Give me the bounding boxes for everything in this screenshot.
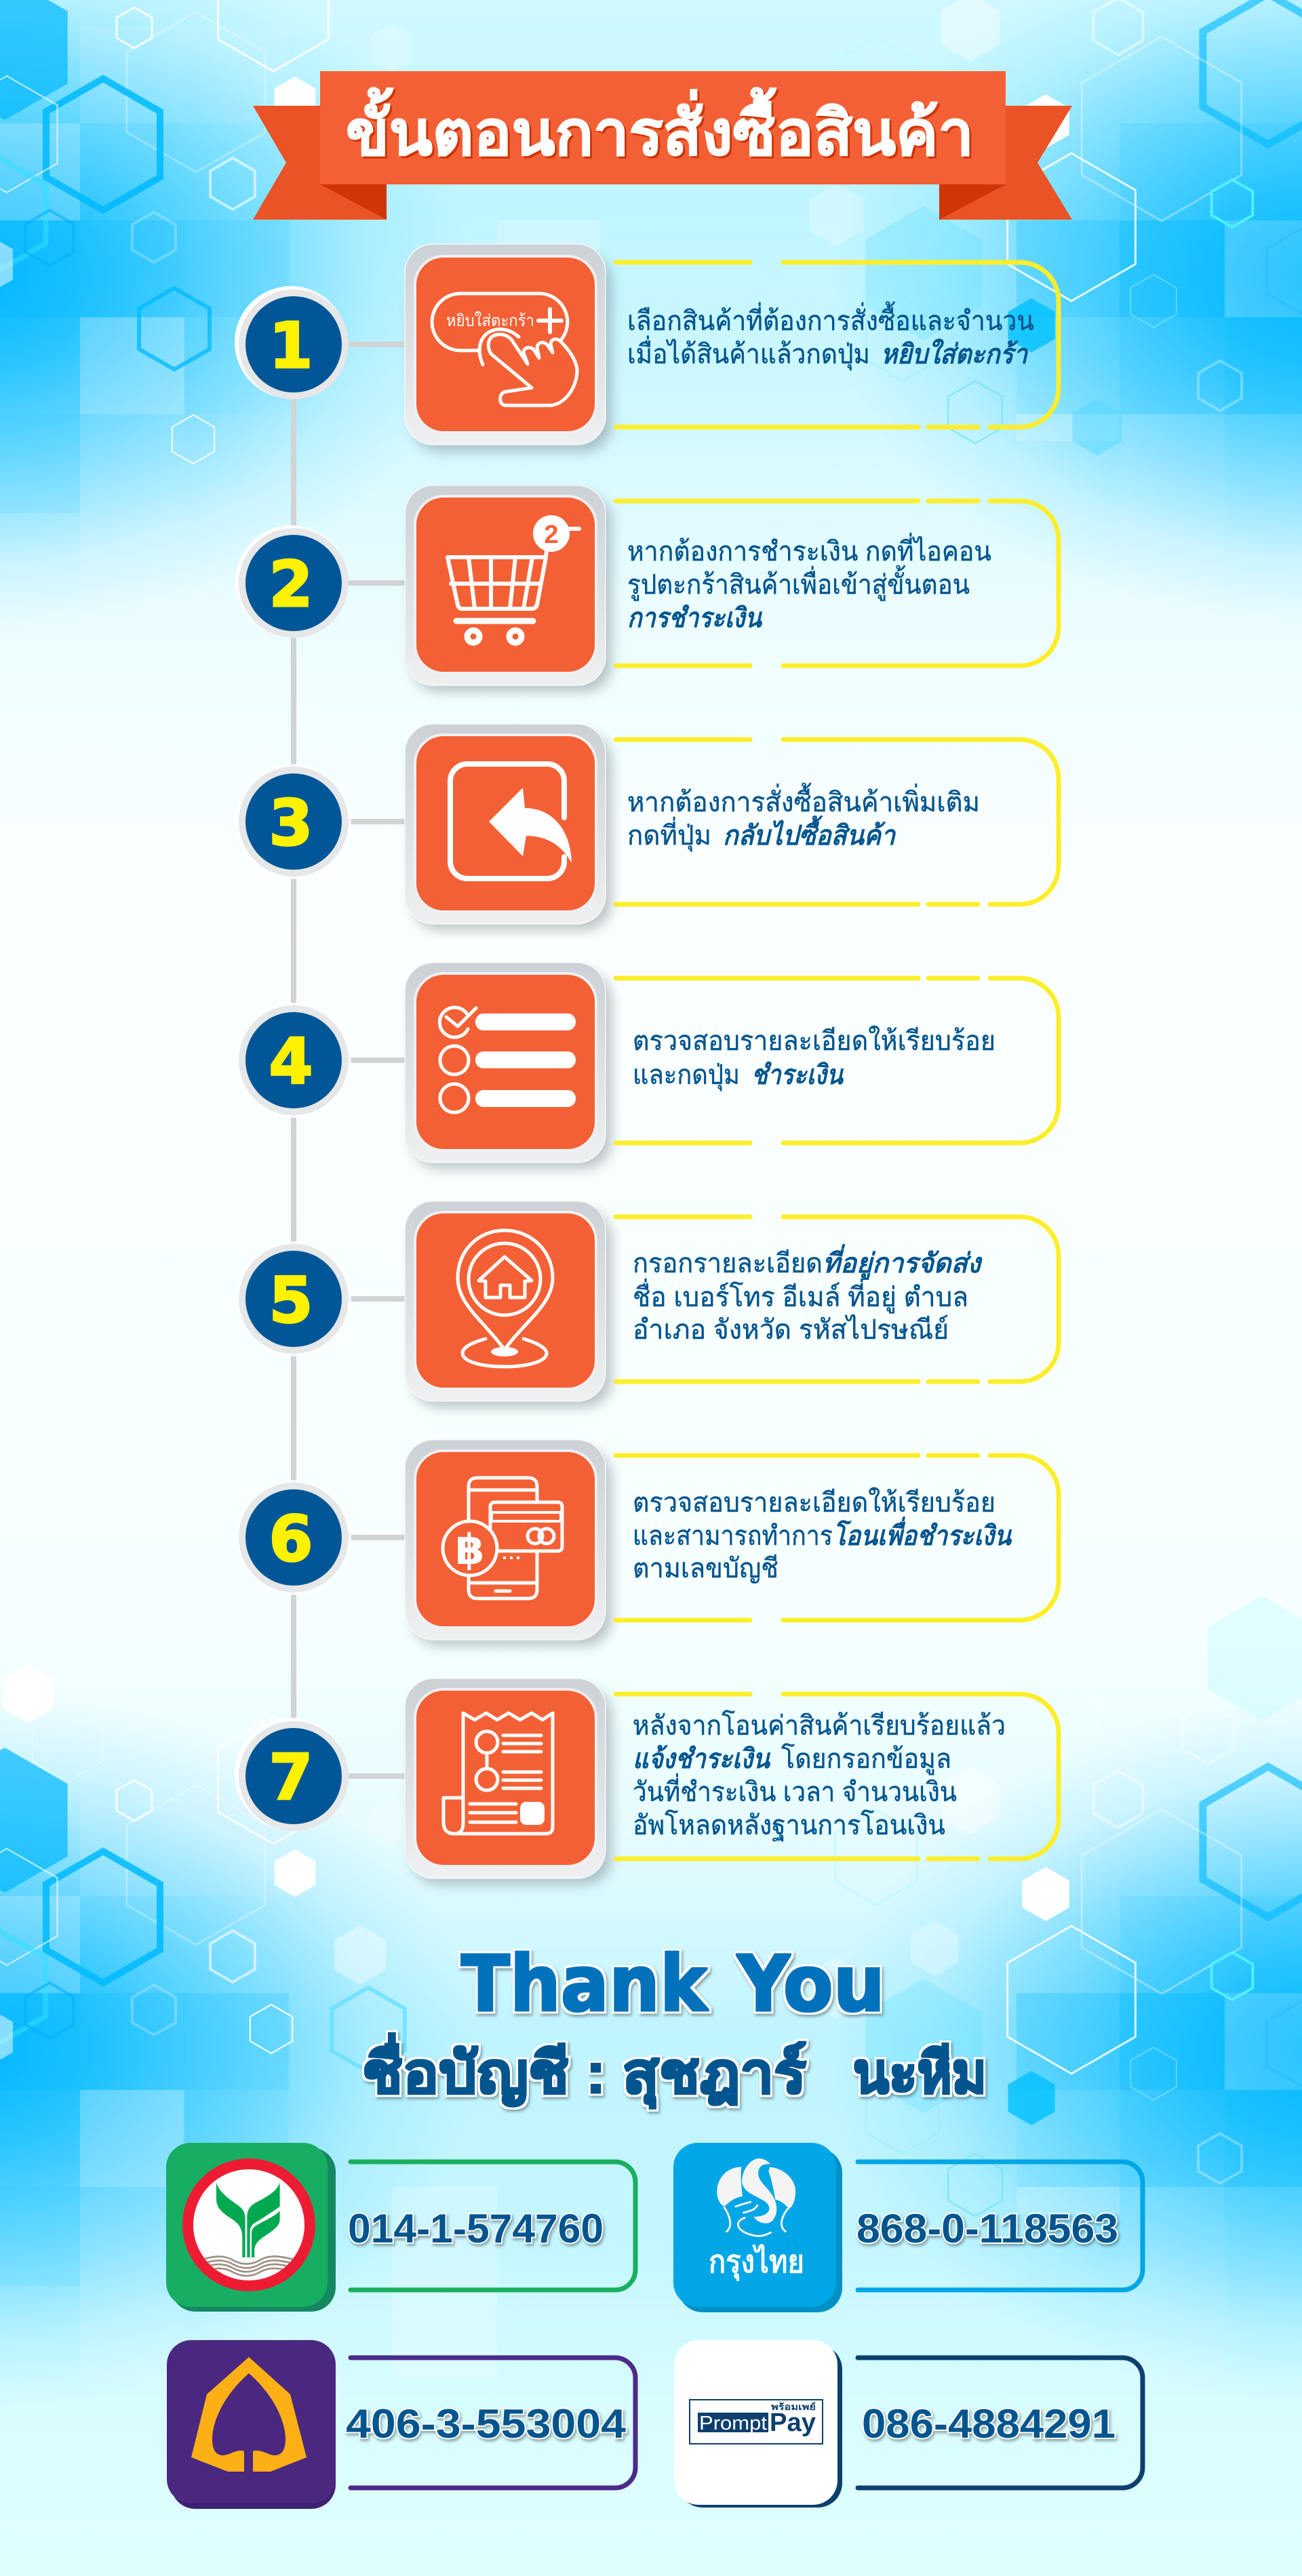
step 6 text: ตรวจสอบรายละเอียดให้เรียบร้อย	[633, 1487, 995, 1518]
icon: tap add-to-cart button	[432, 294, 577, 405]
step 1 text	[627, 301, 1034, 371]
Krungthai logo tile	[673, 2143, 842, 2312]
step 5	[236, 1201, 1059, 1407]
SCB account number: 406-3-553004	[346, 2401, 627, 2447]
step 6	[236, 1440, 1059, 1646]
icon: shopping cart	[448, 515, 579, 643]
account: PromptPay	[674, 2340, 1143, 2508]
step 6 text	[633, 1487, 1012, 1584]
PromptPay number: 086-4884291	[862, 2401, 1116, 2447]
step 7 text: อัพโหลดหลังฐานการโอนเงิน	[633, 1810, 945, 1842]
step 2	[235, 485, 1059, 691]
icon card 3	[405, 724, 612, 930]
step 1 text: เลือกสินค้าที่ต้องการสั่งซื้อและจำนวน	[627, 301, 1034, 336]
Krungthai panel	[858, 2162, 1143, 2290]
number badge 1: 1	[269, 309, 313, 382]
step 1 text: หยิบใส่ตะกร้า	[881, 338, 1028, 369]
step 7	[235, 1678, 1059, 1885]
step 6 text: ตามเลขบัญชี	[633, 1554, 778, 1584]
step 5 text: อำเภอ จังหวัด รหัสไปรษณีย์	[633, 1314, 949, 1345]
step 7 text: โดยกรอกข้อมูล	[781, 1744, 951, 1775]
step 6 text: โอนเพื่อชำระเงิน	[833, 1516, 1012, 1551]
PromptPay logo tile	[674, 2340, 842, 2508]
icon card 5	[405, 1201, 612, 1407]
thank you heading: Thank	[461, 1939, 709, 2029]
thank you heading	[461, 1939, 885, 2029]
step 3 text: หากต้องการสั่งซื้อสินค้าเพิ่มเติม	[627, 782, 980, 818]
PromptPay logo tile: พร้อมเพย์	[771, 2402, 816, 2412]
icon: shopping cart: 2	[544, 521, 559, 549]
number badge 6: 6	[269, 1502, 313, 1575]
step 7 text: หลังจากโอนค่าสินค้าเรียบร้อยแล้ว	[633, 1710, 1006, 1741]
PromptPay logo tile: Pay	[770, 2409, 816, 2437]
step 3 text: กลับไปซื้อสินค้า	[723, 815, 896, 851]
title ribbon	[253, 71, 1072, 220]
number badge 3	[236, 764, 351, 879]
account: SCB	[167, 2340, 635, 2509]
title: ขั้นตอนการสั่งซื้อสินค้า	[346, 87, 974, 168]
step 2 text	[627, 533, 991, 633]
Krungthai account number: 868-0-118563	[856, 2206, 1118, 2251]
step 2 text: รูปตะกร้าสินค้าเพื่อเข้าสู่ขั้นตอน	[627, 565, 970, 601]
step 2 text: หากต้องการชำระเงิน กดที่ไอคอน	[627, 533, 991, 567]
step 7 text: วันที่ชำระเงิน เวลา จำนวนเงิน	[633, 1773, 957, 1807]
number badge 7	[235, 1718, 349, 1831]
step 5 text	[633, 1244, 983, 1345]
icon card 1	[405, 244, 612, 451]
account name: ชื่อบัญชี : สุชฎาร์	[362, 2033, 806, 2109]
callout panel 3	[616, 740, 1059, 904]
icon: back arrow	[450, 764, 572, 879]
callout panel 2	[616, 501, 1059, 666]
step 7 text: แจ้งชำระเงิน	[633, 1744, 771, 1774]
number badge 4: 4	[269, 1025, 313, 1098]
icon: phone payment	[443, 1478, 562, 1598]
SCB logo tile	[167, 2340, 336, 2509]
callout panel 7	[616, 1694, 1059, 1859]
step 3 text: กดที่ปุ่ม	[627, 817, 711, 852]
step 3	[236, 724, 1059, 930]
step 4	[236, 963, 1059, 1169]
step 2 text: การชำระเงิน	[627, 603, 762, 633]
callout panel 5	[616, 1217, 1059, 1382]
callout panel 1	[616, 262, 1059, 427]
account name	[362, 2033, 987, 2109]
step 1	[235, 244, 1059, 451]
icon card 6	[405, 1440, 612, 1646]
number badge 7: 7	[269, 1741, 313, 1814]
account name: นะหีม	[853, 2041, 987, 2105]
account: Krungthai	[673, 2143, 1143, 2312]
SCB panel	[351, 2358, 635, 2488]
number badge 2	[235, 525, 349, 638]
timeline connector	[291, 342, 405, 1779]
Kasikorn panel	[351, 2162, 635, 2290]
account: Kasikorn	[166, 2143, 635, 2312]
number badge 1	[235, 286, 349, 399]
step 4 text: และกดปุ่ม	[633, 1060, 740, 1091]
callout panel 4	[616, 978, 1059, 1143]
step 4 text: ชำระเงิน	[751, 1060, 844, 1090]
icon: receipt	[443, 1713, 553, 1834]
number badge 5: 5	[269, 1264, 313, 1337]
icon card 2	[405, 485, 612, 691]
number badge 6	[236, 1480, 351, 1595]
step 6 text: และสามารถทำการ	[633, 1521, 833, 1551]
number badge 5	[236, 1241, 351, 1356]
PromptPay panel	[858, 2358, 1143, 2488]
icon: checklist	[439, 1007, 576, 1112]
number badge 3: 3	[269, 786, 313, 860]
step 5 text: ชื่อ เบอร์โทร อีเมล์ ที่อยู่ ตำบล	[633, 1279, 968, 1313]
Kasikorn logo tile	[166, 2143, 336, 2312]
step 4 text: ตรวจสอบรายละเอียดให้เรียบร้อย	[633, 1025, 995, 1056]
number badge 4	[236, 1003, 351, 1118]
step 4 text	[633, 1025, 995, 1091]
icon: phone payment: ฿	[455, 1527, 485, 1573]
step 1 text: เมื่อได้สินค้าแล้วกดปุ่ม	[627, 336, 870, 371]
Krungthai logo tile: กรุงไทย	[709, 2244, 804, 2281]
icon: location pin with house	[458, 1230, 553, 1367]
Kasikorn account number: 014-1-574760	[348, 2206, 604, 2251]
icon card 4	[405, 963, 612, 1169]
step 5 text: ที่อยู่การจัดส่ง	[823, 1244, 983, 1281]
thank you heading: You	[736, 1939, 885, 2029]
step 7 text	[633, 1710, 1006, 1842]
callout panel 6	[616, 1455, 1059, 1620]
icon card 7	[405, 1678, 612, 1885]
icon: tap add-to-cart button: หยิบใส่ตะกร้า	[446, 311, 534, 330]
step 5 text: กรอกรายละเอียด	[633, 1249, 823, 1279]
number badge 2: 2	[269, 548, 313, 621]
PromptPay logo tile: Prompt	[699, 2413, 767, 2434]
step 3 text	[627, 782, 980, 852]
